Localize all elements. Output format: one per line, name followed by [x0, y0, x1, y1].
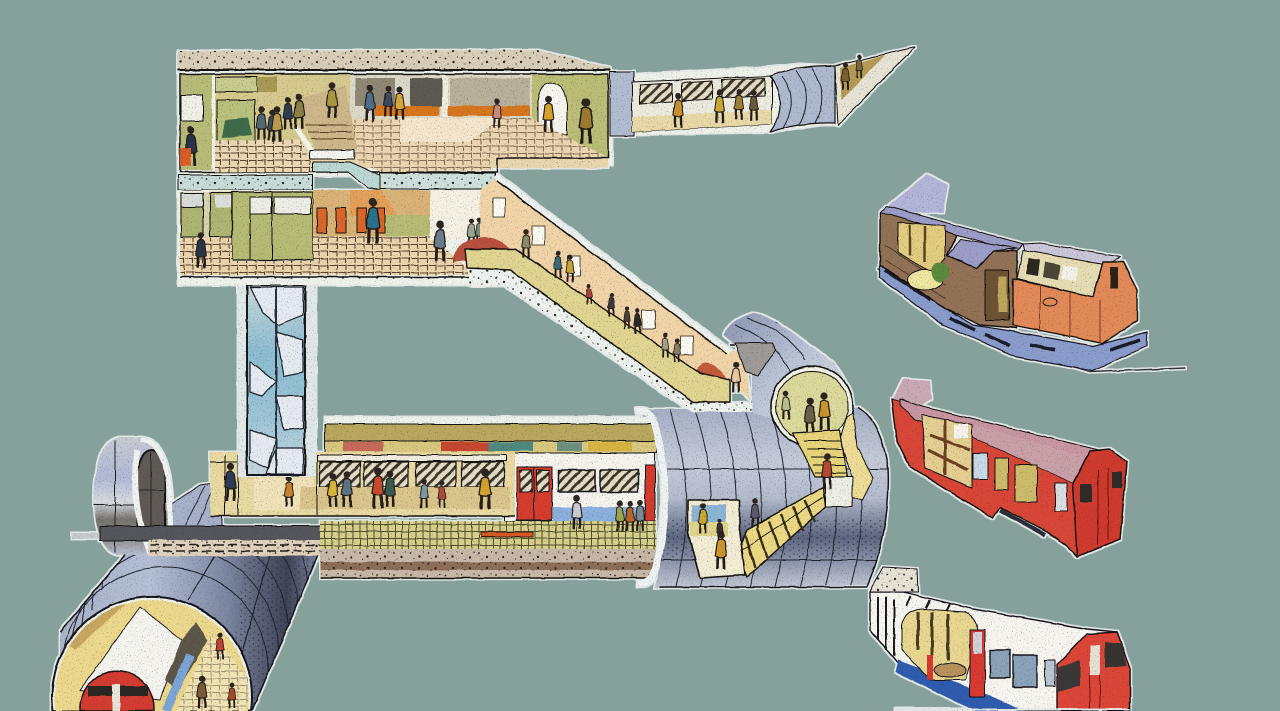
peach tunnel wall — [480, 178, 750, 400]
intermediate floor slab — [178, 162, 495, 190]
wagon roofs — [880, 174, 948, 213]
posters — [493, 198, 693, 355]
landing — [825, 477, 853, 507]
body — [892, 399, 1127, 557]
body — [870, 592, 1130, 711]
escalator tunnel — [453, 176, 760, 412]
lower tunnel edge — [467, 268, 752, 412]
platform with passengers — [176, 635, 252, 711]
upper ticket hall with roof — [178, 50, 612, 176]
doors — [970, 630, 985, 697]
lower ticket hall — [178, 190, 505, 285]
upper tunnel edge — [495, 176, 730, 352]
ticket gates — [317, 208, 385, 233]
platform underside — [320, 549, 656, 578]
windows — [990, 650, 1010, 678]
brown wagon — [880, 210, 1017, 328]
passengers in lower hall — [196, 198, 483, 268]
big platform tunnel, right side — [640, 407, 890, 588]
stair end — [835, 47, 915, 125]
main concourse floor — [345, 118, 606, 172]
escalator foot frame — [730, 345, 760, 403]
passengers in upper hall — [180, 82, 593, 166]
short tunnel ring at left end of track — [94, 437, 222, 555]
back wall with shop windows — [350, 75, 532, 119]
rail — [1000, 510, 1045, 535]
stairs to platform inside big tunnel — [688, 413, 873, 578]
yellow side wall — [840, 413, 873, 500]
track bed — [72, 526, 325, 556]
escalator passengers — [522, 229, 741, 392]
curved tube section — [770, 66, 835, 132]
rails — [878, 268, 1185, 372]
tunnel opening with train — [50, 590, 260, 711]
front cab — [1057, 632, 1130, 711]
upper stair flight — [793, 430, 847, 477]
cross passage tunnel — [723, 313, 853, 446]
big tube front rim — [636, 411, 665, 583]
lower stair flight — [737, 487, 825, 577]
lower tiled floor — [180, 235, 478, 278]
loco body — [1013, 262, 1137, 343]
hall frame — [178, 71, 612, 176]
blue band — [895, 660, 1025, 711]
left room wall — [181, 75, 212, 170]
spiral stair treads — [250, 287, 303, 474]
wagon interior — [898, 222, 945, 272]
stairs between levels — [296, 85, 358, 159]
carriage interior — [922, 415, 972, 488]
passage opening — [771, 366, 853, 446]
cross passage room — [688, 500, 745, 578]
red escalator balustrade — [453, 237, 517, 262]
platform back wall with advertising — [325, 417, 657, 453]
windows — [973, 453, 988, 479]
end roof — [893, 379, 932, 406]
left walls — [180, 192, 315, 238]
barrier wall — [313, 190, 430, 236]
roof — [900, 399, 1103, 483]
floor slab — [178, 275, 505, 283]
cutaway carriage interior — [210, 452, 515, 516]
big diagonal running tunnel, lower left — [50, 554, 318, 711]
upper passage tunnel, top right — [610, 47, 915, 136]
train in tunnel — [80, 607, 182, 700]
right wall with arch — [532, 75, 607, 157]
passenger on stair — [822, 453, 832, 489]
train 3: white and blue tube car — [870, 567, 1130, 711]
booth — [232, 192, 313, 260]
left tiled floor — [215, 140, 316, 172]
carriage interior — [902, 609, 978, 680]
train at platform — [505, 453, 655, 521]
train 2: red carriage — [892, 379, 1127, 557]
chassis — [880, 265, 1147, 371]
dotted end roof — [870, 567, 918, 592]
front cab — [1073, 449, 1127, 557]
platform floor with bench and passengers — [320, 495, 656, 578]
passage interior — [632, 76, 772, 132]
escalator band — [465, 249, 730, 402]
loco cab — [1023, 243, 1120, 265]
ring opening — [137, 450, 165, 530]
spiral stair shaft — [238, 285, 316, 477]
train 1: shunting locomotive — [878, 174, 1185, 372]
roof slab — [178, 50, 611, 71]
